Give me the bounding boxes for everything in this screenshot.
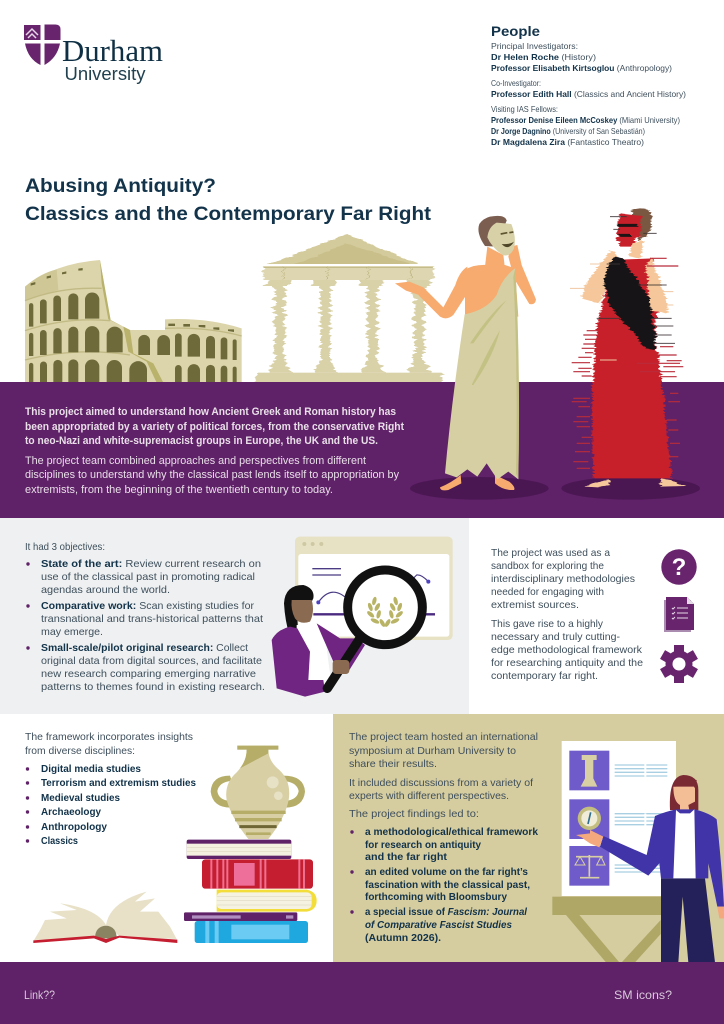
framework text: Anthropology bbox=[41, 822, 107, 833]
symposium text: of Comparative Fascist Studies bbox=[365, 920, 512, 931]
icon: shield bbox=[24, 24, 60, 65]
intro text: been appropriated by a variety of political forces, from the conservative Right bbox=[25, 421, 404, 433]
sandbox text: contemporary far right. bbox=[491, 671, 598, 682]
title: Classics and the Contemporary Far Right bbox=[25, 203, 432, 225]
objectives text: State of the art: Review current research on bbox=[41, 559, 261, 570]
icon: question mark bbox=[661, 549, 697, 585]
panel: objectives background bbox=[0, 518, 469, 714]
people panel: People bbox=[491, 23, 540, 39]
symposium text: symposium at Durham University to bbox=[349, 746, 516, 757]
framework text: The framework incorporates insights bbox=[25, 732, 193, 743]
people panel: Co-Investigator: bbox=[491, 79, 541, 88]
people panel: Professor Edith Hall (Classics and Ancient History) bbox=[491, 90, 686, 99]
illustration: temple bbox=[257, 234, 442, 383]
framework text: Terrorism and extremism studies bbox=[41, 778, 196, 789]
footer band bbox=[0, 962, 724, 1024]
objectives text: new research comparing emerging narrative bbox=[41, 669, 256, 680]
sandbox text: interdisciplinary methodologies bbox=[491, 574, 635, 585]
objectives text bbox=[25, 542, 265, 693]
person bbox=[661, 878, 715, 962]
people panel: Professor Elisabeth Kirtsoglou (Anthropology) bbox=[491, 64, 672, 73]
objectives text: It had 3 objectives: bbox=[25, 542, 105, 553]
objectives text: may emerge. bbox=[41, 627, 103, 638]
sandbox text: needed for engaging with bbox=[491, 587, 604, 598]
illustration: presenter at board bbox=[552, 741, 724, 962]
symposium text: an edited volume on the far right’s bbox=[365, 867, 528, 878]
sandbox text: extremist sources. bbox=[491, 600, 579, 611]
sandbox text bbox=[491, 548, 643, 682]
people panel: Principal Investigators: bbox=[491, 42, 578, 51]
framework text: Medieval studies bbox=[41, 793, 120, 804]
footer link placeholder: Link?? bbox=[24, 988, 55, 1002]
icon: question mark: ? bbox=[672, 554, 686, 581]
symposium text: a methodological/ethical framework bbox=[365, 827, 538, 838]
sandbox text: necessary and truly cutting- bbox=[491, 632, 620, 643]
objectives text: agendas around the world. bbox=[41, 585, 170, 596]
symposium text: for research on antiquity bbox=[365, 840, 481, 851]
people panel: Professor Denise Eileen McCoskey (Miami University) bbox=[491, 116, 680, 125]
intro text bbox=[25, 406, 404, 496]
footer social placeholder: SM icons? bbox=[614, 988, 672, 1002]
sandbox text: This gave rise to a highly bbox=[491, 619, 604, 630]
symposium text: The project team hosted an international bbox=[349, 732, 538, 743]
symposium text: It included discussions from a variety of bbox=[349, 778, 533, 789]
framework text: from diverse disciplines: bbox=[25, 746, 135, 757]
people panel: Dr Jorge Dagnino (University of San Sebastián) bbox=[491, 127, 645, 136]
framework text: Archaeology bbox=[41, 807, 101, 818]
objectives text: transnational and trans-historical patterns that bbox=[41, 614, 263, 625]
panel: symposium background bbox=[333, 714, 724, 962]
illustration: man holding smiling mask bbox=[395, 216, 549, 500]
objectives text: Small-scale/pilot original research: Collect bbox=[41, 643, 248, 654]
objectives text: Comparative work: Scan existing studies for bbox=[41, 601, 255, 612]
sandbox text: edge methodological framework bbox=[491, 645, 643, 656]
people panel: Dr Magdalena Zira (Fantastico Theatro) bbox=[491, 138, 644, 147]
icon: checklist document bbox=[664, 597, 694, 632]
symposium text: a special issue of Fascism: Journal bbox=[365, 907, 528, 918]
open book bbox=[33, 892, 177, 943]
people panel: Visiting IAS Fellows: bbox=[491, 105, 558, 114]
symposium text: share their results. bbox=[349, 759, 437, 770]
illustration: vase on books and open book bbox=[33, 746, 317, 943]
objectives text: use of the classical past in promoting radical bbox=[41, 572, 255, 583]
symposium text: forthcoming with Bloomsbury bbox=[365, 892, 507, 903]
sandbox text: The project was used as a bbox=[491, 548, 610, 559]
logo: Durham University bbox=[24, 24, 163, 84]
people panel: Dr Helen Roche (History) bbox=[491, 53, 596, 62]
sandbox text: for researching antiquity and the bbox=[491, 658, 643, 669]
symposium text: and the far right bbox=[365, 852, 448, 863]
intro text: extremists, from the beginning of the twentieth century to today. bbox=[25, 484, 333, 496]
framework text: Classics bbox=[41, 836, 78, 847]
people panel bbox=[491, 23, 686, 147]
illustration: researcher with magnifying glass bbox=[272, 537, 453, 697]
framework text bbox=[25, 732, 196, 847]
vase bbox=[211, 746, 305, 839]
symposium text: (Autumn 2026). bbox=[365, 933, 441, 944]
framework text: Digital media studies bbox=[41, 764, 141, 775]
title: Abusing Antiquity? bbox=[25, 175, 216, 197]
sandbox text: sandbox for exploring the bbox=[491, 561, 604, 572]
purple intro band bbox=[0, 382, 724, 518]
illustration: glitched woman with red mask bbox=[561, 208, 700, 500]
intro text: to neo-Nazi and white-supremacist groups in Europe, the UK and the US. bbox=[25, 435, 378, 447]
symposium text: The project findings led to: bbox=[349, 809, 479, 820]
intro text: disciplines to understand why the classical past lends itself to appropriation by bbox=[25, 469, 400, 481]
logo: Durham University: University bbox=[64, 64, 146, 84]
intro text: This project aimed to understand how Ancient Greek and Roman history has bbox=[25, 406, 396, 418]
logo: Durham University: Durham bbox=[62, 33, 163, 68]
icon: gear bbox=[660, 645, 698, 683]
illustration: colosseum bbox=[25, 260, 242, 383]
symposium text: experts with different perspectives. bbox=[349, 791, 509, 802]
objectives text: original data from digital sources, and facilitate bbox=[41, 656, 262, 667]
symposium text bbox=[349, 732, 538, 944]
title bbox=[25, 175, 432, 225]
intro text: The project team combined approaches and perspectives from different bbox=[25, 455, 366, 467]
objectives text: patterns to themes found in existing research. bbox=[41, 682, 265, 693]
symposium text: fascination with the classical past, bbox=[365, 880, 530, 891]
